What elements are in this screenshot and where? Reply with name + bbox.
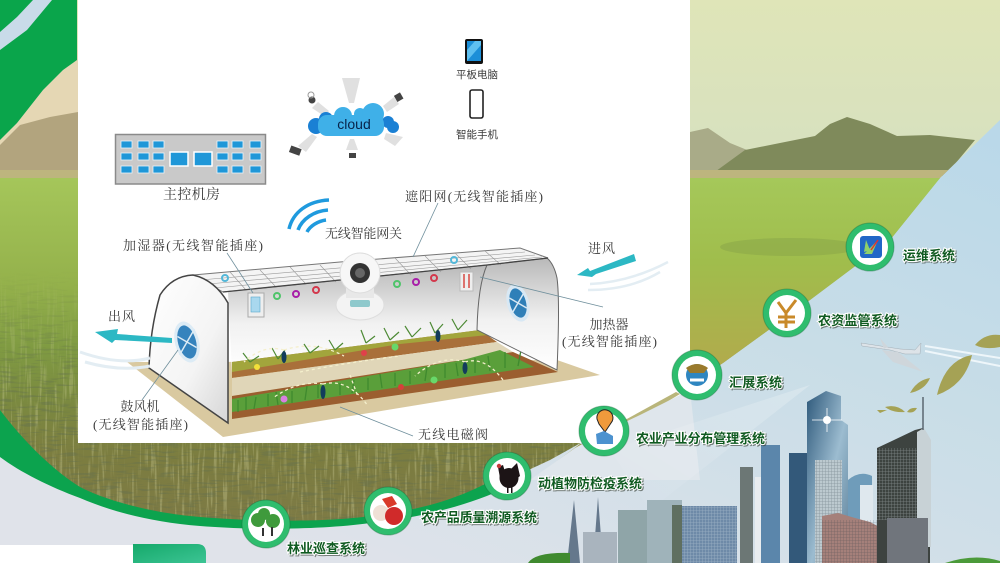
diagram: control room xyxy=(116,134,266,203)
right end arch xyxy=(477,258,558,370)
label: air in: 进风 xyxy=(588,241,615,256)
tower sparkle xyxy=(812,408,842,432)
label: exhibition: 汇展系统 xyxy=(729,375,782,390)
label: smartphone: 智能手机 xyxy=(456,128,498,141)
sky xyxy=(0,0,1000,180)
right field xyxy=(690,178,940,365)
system node: forestry xyxy=(242,500,290,548)
city sky corner over panel xyxy=(530,390,700,480)
right fan xyxy=(502,282,534,324)
label: blower: 鼓风机 xyxy=(120,399,160,414)
cloud body xyxy=(318,103,384,136)
block windows xyxy=(682,506,737,563)
main glass tower xyxy=(807,391,848,563)
back wall xyxy=(228,264,490,372)
dark horizontal flecks xyxy=(0,306,576,520)
icon: hen xyxy=(497,463,520,493)
left sky xyxy=(0,50,78,144)
brown blocks xyxy=(822,513,885,563)
icon: vegetables xyxy=(373,496,403,525)
back bed plants xyxy=(243,319,467,362)
skyscraper light edge xyxy=(917,428,931,547)
icon: map pin xyxy=(596,410,613,444)
light grass streaks xyxy=(0,306,580,520)
right blue tower xyxy=(848,474,872,543)
system node: exhibition xyxy=(672,350,722,400)
shade net roof xyxy=(193,248,548,292)
diagram labels xyxy=(93,189,657,442)
brown block windows xyxy=(822,520,885,563)
icon: globe xyxy=(686,364,708,386)
system node: traceability xyxy=(364,487,412,535)
wireless camera gateway xyxy=(336,253,384,320)
icon: trees xyxy=(251,508,280,536)
side podium xyxy=(887,518,928,563)
icon: compass app xyxy=(860,236,882,258)
bottom-left tab: white xyxy=(0,545,133,563)
outflow air arrow xyxy=(80,329,172,368)
sprinkler spray xyxy=(244,346,503,406)
field textures xyxy=(0,310,580,520)
left fan xyxy=(170,319,204,365)
leader lines xyxy=(142,203,603,436)
olive strip by the diagonal xyxy=(625,392,680,424)
label: air out: 出风 xyxy=(108,309,135,324)
label: gateway: 无线智能网关 xyxy=(325,226,402,241)
rice field xyxy=(0,178,940,521)
label: forestry: 林业巡查系统 xyxy=(287,541,365,556)
cloud network xyxy=(289,78,403,158)
label: solenoid valve: 无线电磁阀 xyxy=(418,427,488,442)
bottom-left tab: teal xyxy=(133,544,206,563)
cloud side lobes xyxy=(308,112,399,134)
low blocks xyxy=(583,532,617,563)
right distant hill xyxy=(690,128,746,170)
label: heater: (无线智能插座) xyxy=(562,334,657,349)
label: blower: (无线智能插座) xyxy=(93,417,188,432)
icon: yuan symbol xyxy=(778,300,796,328)
label: control room: 主控机房 xyxy=(163,186,220,203)
ground greenery right xyxy=(945,557,1000,563)
label: shade net: 遮阳网(无线智能插座) xyxy=(405,189,543,204)
walking path xyxy=(232,342,513,396)
field dark band xyxy=(720,238,860,256)
label: tablet: 平板电脑 xyxy=(456,68,498,81)
icon: wifi arcs xyxy=(289,200,329,232)
sensors xyxy=(222,257,457,299)
airplane xyxy=(861,338,1000,372)
label: traceability: 农产品质量溯源系统 xyxy=(421,510,537,525)
tan ground base xyxy=(127,360,600,437)
front planting bed soil xyxy=(232,352,558,419)
white diagram panel xyxy=(78,0,690,443)
twin spires xyxy=(567,497,603,563)
light beams xyxy=(610,385,810,510)
green curved band xyxy=(0,410,510,529)
dark skyscraper xyxy=(877,428,930,563)
system node: operations xyxy=(846,223,894,271)
back planting bed soil xyxy=(232,330,497,378)
flying leaves xyxy=(877,335,1000,413)
icon: smartphone xyxy=(470,90,483,118)
top-left green ribbon xyxy=(0,0,77,140)
greenhouse xyxy=(127,248,600,437)
antenna xyxy=(922,397,924,430)
system node: industry distribution xyxy=(579,406,629,456)
bed sensors xyxy=(254,344,438,402)
cloud label: cloud xyxy=(337,116,371,132)
label: industry distribution: 农业产业分布管理系统 xyxy=(636,431,765,446)
label: heater xyxy=(562,317,657,349)
label: epidemic prevention: 动植物防检疫系统 xyxy=(538,476,642,491)
tower lower facade xyxy=(815,460,842,563)
label: heater: 加热器 xyxy=(589,317,629,332)
back bed foliage xyxy=(232,330,488,372)
label: humidifier: 加湿器(无线智能插座) xyxy=(123,238,263,253)
device icons xyxy=(289,92,403,158)
ground greenery left xyxy=(528,553,570,563)
label: blower xyxy=(93,399,188,432)
heater unit xyxy=(460,272,473,291)
system node: epidemic prevention xyxy=(483,452,531,500)
system node: agri supplies xyxy=(763,289,811,337)
olive sliver beneath diagonal xyxy=(545,444,600,470)
right main hill xyxy=(712,117,975,176)
solenoid valves xyxy=(282,330,468,399)
signal wedges xyxy=(298,78,403,152)
humidifier unit xyxy=(248,293,264,317)
front bed grass xyxy=(232,350,534,412)
facade windows xyxy=(815,460,842,563)
dark skyscraper windows xyxy=(877,448,917,520)
light stripe xyxy=(0,0,52,50)
front bed grass blades xyxy=(238,350,521,412)
far field strip xyxy=(0,170,1000,180)
icon: tablet xyxy=(465,39,483,64)
label: agri supplies: 农资监管系统 xyxy=(818,313,897,328)
left end arch xyxy=(149,275,228,423)
server cabinet xyxy=(116,134,266,184)
inflow air arrow xyxy=(577,254,668,290)
label: operations: 运维系统 xyxy=(903,248,955,263)
left hill xyxy=(0,112,78,172)
city skyline xyxy=(528,385,1000,563)
